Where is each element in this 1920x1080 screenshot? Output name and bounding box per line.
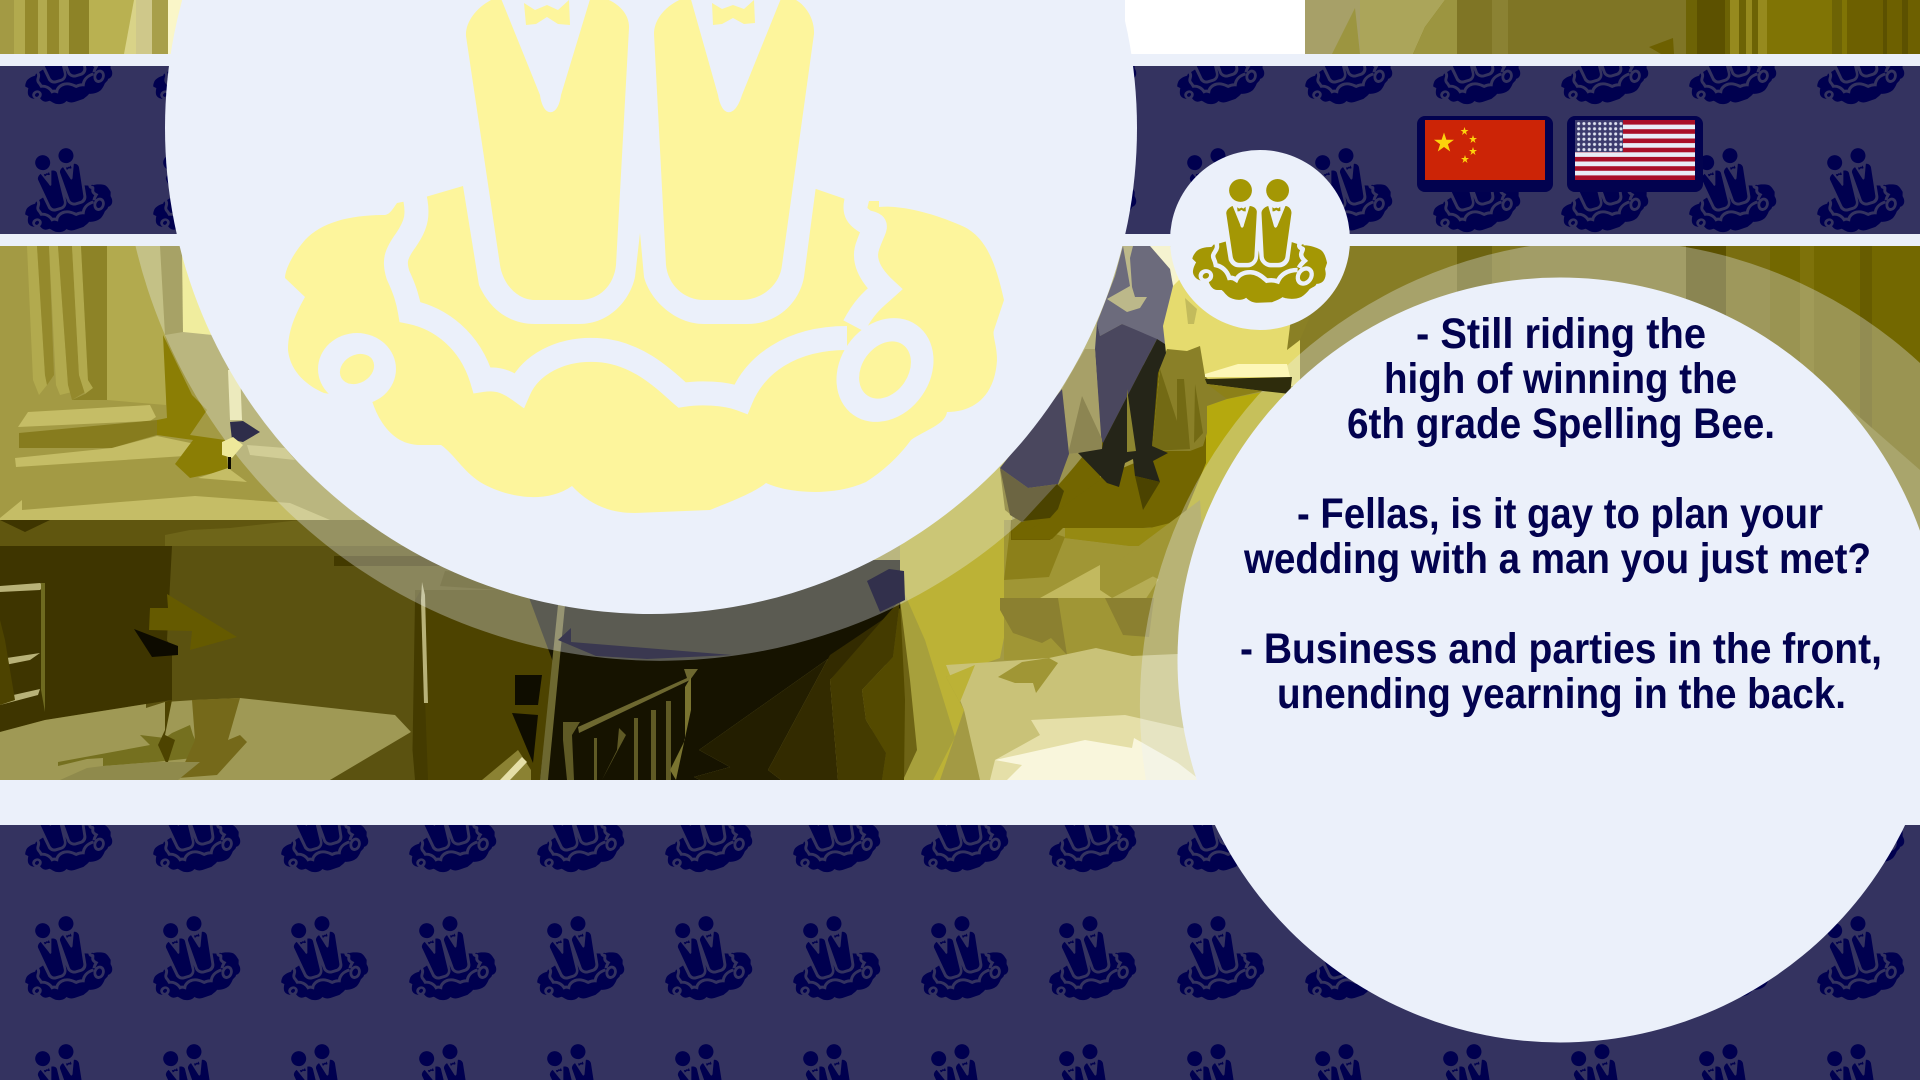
text circle (1178, 278, 1920, 1042)
overlay: big circle translucent halo (136, 246, 1184, 661)
scene: upper right olive forest stripes (1291, 246, 1920, 530)
bullet: business and parties (1240, 625, 1882, 718)
top strip: left image slice (0, 0, 184, 54)
scene: base wall (0, 246, 1267, 780)
small emblem circle (1170, 150, 1350, 330)
top strip: right image slice (1305, 0, 1920, 54)
scene: yellow cave glow near small emblem (1000, 246, 1300, 580)
bullet: wedding: - Fellas, is it gay to plan your (1297, 490, 1823, 538)
bullet: business and parties: unending yearning in the back. (1277, 670, 1846, 718)
scene: dark room and lower wall (0, 520, 600, 780)
scene: left columns and ledges (0, 246, 330, 520)
text block: bullet points (1240, 310, 1882, 718)
bullet: spelling bee (1347, 310, 1775, 448)
main illustrated scene (0, 240, 1920, 780)
big circle (165, 0, 1137, 614)
scene: floor (0, 698, 415, 780)
top strip: white gap (1125, 0, 1305, 54)
navy band: upper pattern (0, 66, 1920, 234)
flag: China (1417, 116, 1553, 192)
scene: dark stairwell (482, 560, 900, 780)
icon: large grooms on cloud (285, 0, 1004, 513)
bullet: spelling bee: 6th grade Spelling Bee. (1347, 400, 1775, 448)
flag: United States (1567, 116, 1703, 192)
scene: right cave gradient bands (860, 440, 1204, 780)
bullet: wedding (1243, 490, 1871, 583)
scene: small dark navy accents (222, 421, 905, 659)
icon: small grooms emblem (1192, 179, 1327, 303)
navy band: lower pattern (0, 825, 1920, 1080)
bullet: spelling bee: - Still riding the (1416, 310, 1706, 358)
bullet: spelling bee: high of winning the (1384, 355, 1737, 403)
scene: grey figure and dark legs (1000, 246, 1292, 522)
overlay: text circle translucent halo (1140, 240, 1920, 780)
